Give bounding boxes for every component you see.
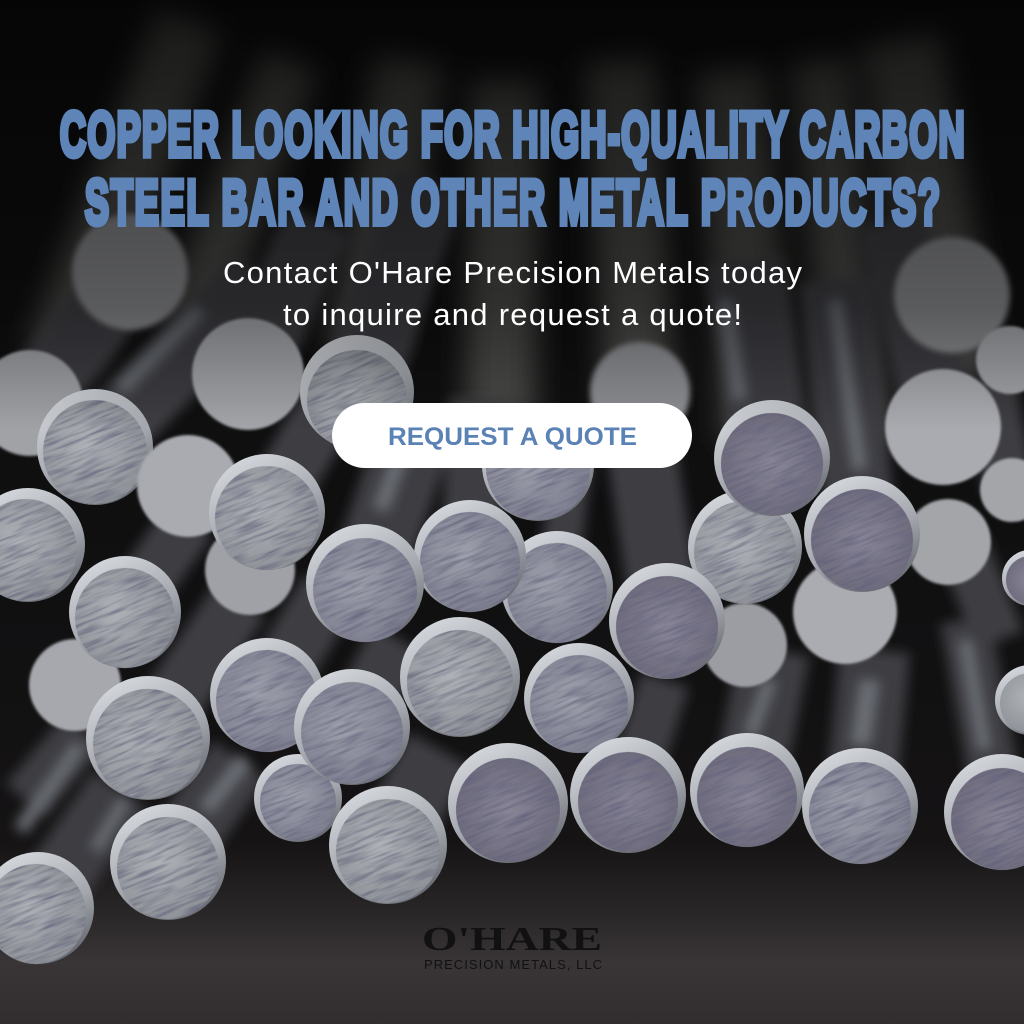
bar end [102,802,234,934]
bar end [679,486,811,618]
bar end [205,525,295,615]
bar end [885,369,1001,485]
bar end [192,318,304,430]
bar end [137,435,239,537]
bar end [0,350,83,456]
far blurred bar ends [72,214,1010,442]
bar end [794,747,926,879]
bar end [249,753,347,851]
subheading line 1: Contact O'Hare Precision Metals today [223,255,802,290]
logo: O'Hare Precision Metals, LLC [422,921,602,972]
bar end [201,635,333,767]
bar end [391,614,529,752]
bar end [515,640,643,768]
far out-of-focus bar shafts [60,20,960,440]
bar end [199,450,335,586]
bar end [1002,550,1024,606]
title [60,99,965,238]
bar end [60,553,190,683]
logo: O'Hare Precision Metals, LLC: O'HARE [422,921,602,958]
bar end [703,603,787,687]
bar end [793,560,897,664]
shaft highlights [20,300,985,850]
bar end [27,384,163,520]
bar end [470,400,606,536]
bar end [492,528,622,658]
button: request a quote [332,403,692,468]
title line 2: STEEL BAR AND OTHER METAL PRODUCTS? [85,167,940,238]
bar end [286,667,418,799]
button: request a quote: REQUEST A QUOTE [388,423,637,451]
back row bars [0,318,1024,522]
bar end [601,561,733,693]
bar end [936,753,1024,885]
bar end [563,737,693,867]
bar shafts [25,180,1010,908]
bar end [292,335,422,465]
subheading line 2: to inquire and request a quote! [283,297,742,332]
bar end [76,672,220,816]
bar end [980,458,1024,522]
bar end [405,497,535,627]
bar end [682,732,812,862]
bar end [796,474,928,606]
title line 1: COPPER LOOKING FOR HIGH-QUALITY CARBON [60,99,965,170]
bar end [995,665,1024,735]
bar end [320,783,456,919]
bar end [440,742,576,878]
bar end [0,849,101,979]
logo: O'Hare Precision Metals, LLC: PRECISION METALS, LLC [424,957,602,972]
subheading [223,255,802,332]
bar end [706,398,838,530]
bar end [976,326,1024,394]
bar end [297,522,433,658]
bar end [29,639,121,731]
bar end [0,484,92,616]
bar end [905,499,991,585]
